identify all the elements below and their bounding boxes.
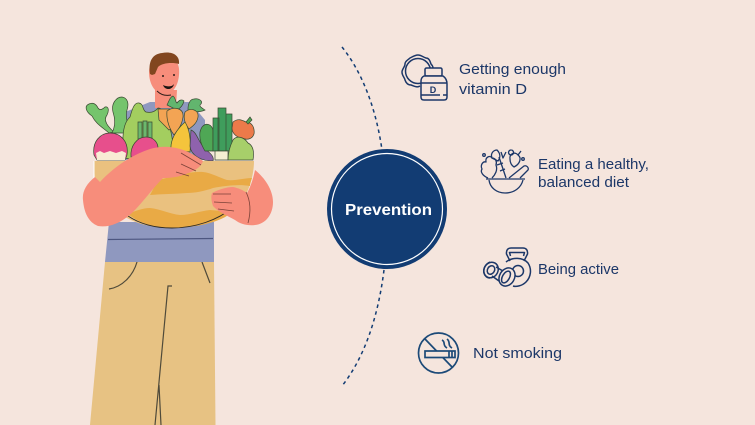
label text: vitamin D <box>459 81 527 98</box>
yellow pepper <box>171 122 190 152</box>
label text: Eating a healthy, <box>538 156 649 173</box>
label text: Getting enough <box>459 61 566 78</box>
central circle: Prevention <box>327 149 447 269</box>
arm and hand: left <box>83 147 203 226</box>
item: vitamin D <box>402 55 566 100</box>
label text: Being active <box>538 261 619 278</box>
item: healthy diet <box>481 150 649 193</box>
central circle: Prevention: Prevention <box>345 202 432 219</box>
icon: kettlebell and dumbbell <box>481 248 530 289</box>
arm and hand: right <box>211 170 273 225</box>
item: being active <box>481 248 619 289</box>
label text: Not smoking <box>473 345 562 362</box>
large radish <box>94 133 127 160</box>
label text: balanced diet <box>538 174 630 191</box>
cucumber <box>200 124 213 151</box>
bowl <box>94 161 254 228</box>
icon: salad bowl <box>481 150 528 193</box>
carrots <box>158 96 205 135</box>
vegetables <box>86 96 254 162</box>
vitamin D label: D <box>430 85 437 95</box>
illustration: man holding a bowl of vegetables <box>83 52 273 425</box>
aubergine <box>190 130 213 161</box>
trousers <box>90 262 216 425</box>
head <box>149 52 179 108</box>
dashed arc: lower <box>342 270 384 386</box>
broccoli <box>228 137 253 160</box>
leafy greens <box>86 97 173 162</box>
red pepper <box>232 120 254 139</box>
icon: crossed cigarette <box>418 333 458 373</box>
dashed arc: upper <box>342 47 382 150</box>
small radish <box>131 121 158 158</box>
shirt <box>105 102 214 262</box>
icon: sun and vitamin bottle <box>402 55 447 100</box>
item: not smoking <box>418 333 562 373</box>
leeks <box>213 108 232 160</box>
